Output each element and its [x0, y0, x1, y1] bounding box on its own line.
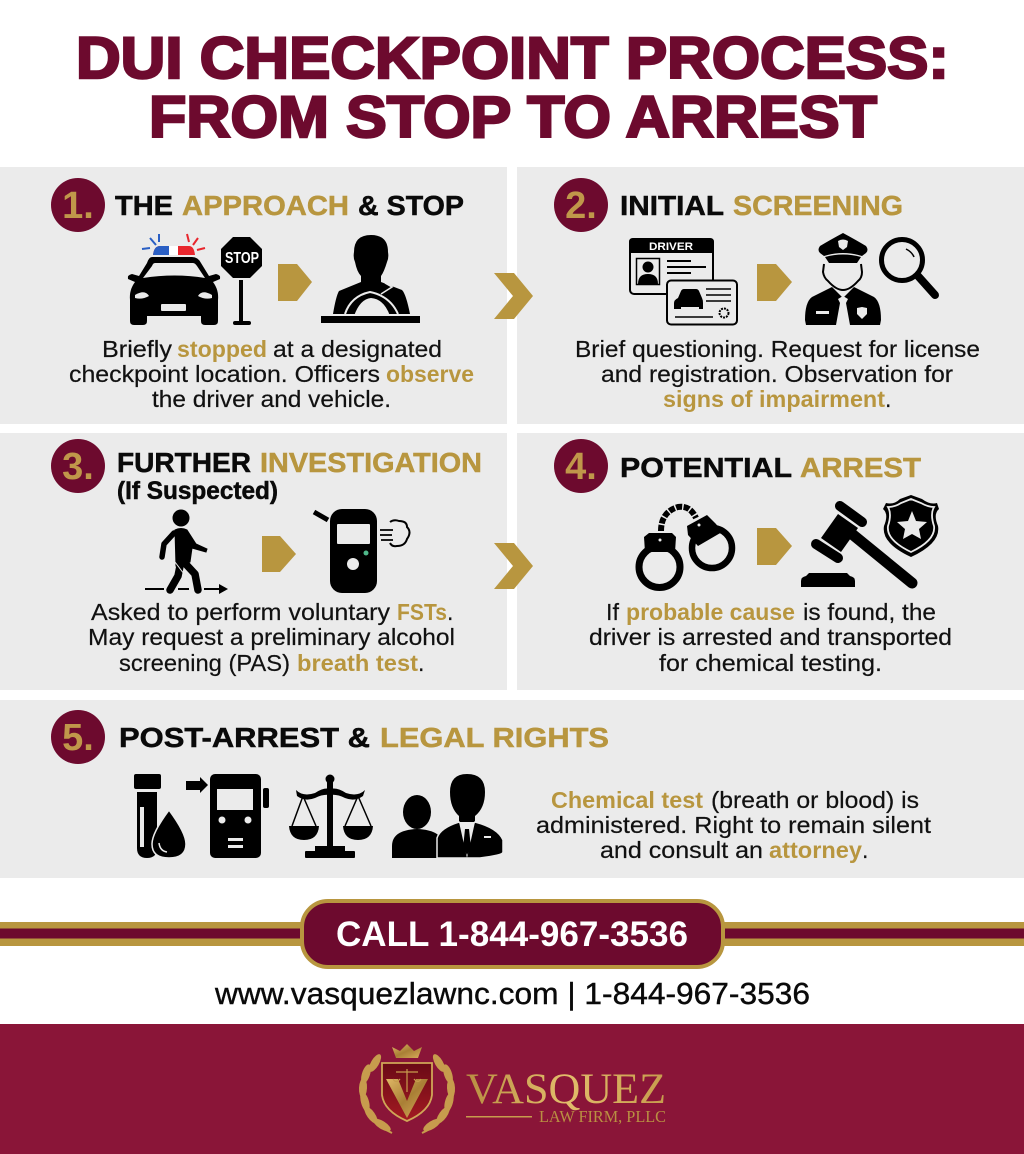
icon: evidential breath machine	[186, 774, 269, 858]
body text	[589, 599, 952, 676]
panel: step 4 potential arrest	[517, 433, 1024, 690]
icon: stop sign	[221, 237, 262, 325]
body text: If	[606, 599, 620, 625]
step number 3	[51, 439, 105, 493]
arrow	[757, 264, 792, 301]
step number 2: 2.	[565, 185, 597, 227]
call banner stripes	[0, 922, 1024, 946]
heading: further investigation: FURTHER	[117, 447, 251, 478]
heading: potential arrest	[620, 452, 921, 483]
body text: May request a preliminary alcohol	[88, 624, 455, 650]
body text: .	[885, 386, 891, 412]
icon: breathalyzer	[314, 509, 410, 593]
icon: gavel	[801, 506, 912, 587]
call button: CALL 1-844-967-3536	[336, 915, 688, 954]
body text: the driver and vehicle.	[152, 386, 391, 412]
icon: police car	[128, 234, 220, 325]
body text: observe	[386, 361, 474, 387]
icon: handcuffs	[639, 507, 732, 588]
step number 5: 5.	[62, 717, 94, 759]
body text: driver is arrested and transported	[589, 624, 952, 650]
heading: post-arrest and legal rights: POST-ARREST &	[119, 722, 370, 753]
body text: .	[447, 599, 453, 625]
body text: Brief questioning. Request for license	[575, 336, 980, 362]
title: FROM STOP TO ARREST	[149, 85, 877, 150]
icon: police officer	[805, 233, 881, 325]
icon: person walking the line	[145, 510, 228, 594]
heading: further investigation: INVESTIGATION	[260, 447, 482, 478]
body text: breath test	[297, 650, 418, 676]
panel: step 5 post-arrest and legal rights	[0, 700, 1024, 878]
icon: police badge	[883, 495, 939, 557]
logo laurel left	[358, 1052, 393, 1134]
body text: probable cause	[626, 599, 795, 625]
heading: further investigation: (If Suspected)	[117, 477, 278, 505]
title	[76, 26, 949, 150]
heading: the approach and stop	[115, 190, 464, 221]
body text: attorney	[769, 837, 862, 863]
body text: (breath or blood) is	[711, 787, 919, 813]
icon: blood test tube and drop	[134, 774, 186, 858]
logo laurel right	[421, 1052, 456, 1134]
icon: stop sign: STOP	[225, 250, 259, 267]
heading: post-arrest and legal rights	[119, 722, 609, 753]
step number 3: 3.	[62, 446, 94, 488]
body text: checkpoint location. Officers	[69, 361, 380, 387]
logo: vasquez law firm	[358, 1044, 666, 1134]
heading: the approach and stop: & STOP	[358, 190, 464, 221]
step number 1: 1.	[62, 185, 94, 227]
step number 4	[554, 439, 608, 493]
heading: further investigation	[117, 447, 482, 505]
body text	[69, 336, 474, 412]
heading: the approach and stop: THE	[115, 190, 173, 221]
logo shield	[382, 1063, 432, 1121]
body text: is found, the	[803, 599, 936, 625]
icon: scales of justice	[289, 774, 373, 858]
body text: .	[862, 837, 868, 863]
body text: screening (PAS)	[119, 650, 290, 676]
body text: at a designated	[273, 336, 442, 362]
step number 2	[554, 178, 608, 232]
icon: driver license: DRIVER	[649, 241, 693, 253]
heading: initial screening: SCREENING	[733, 190, 903, 221]
arrow	[278, 264, 312, 301]
body text: .	[418, 650, 424, 676]
body text: and consult an	[600, 837, 763, 863]
heading: post-arrest and legal rights: LEGAL RIGHTS	[380, 722, 609, 753]
logo wordmark: VASQUEZ	[466, 1066, 666, 1113]
heading: potential arrest: ARREST	[800, 452, 921, 483]
heading: potential arrest: POTENTIAL	[620, 452, 792, 483]
panel: step 1 the approach and stop	[0, 167, 507, 424]
heading: initial screening: INITIAL	[620, 190, 724, 221]
contact line: www.vasquezlawnc.com | 1-844-967-3536	[214, 976, 810, 1011]
call button	[302, 901, 723, 967]
step number 5	[51, 710, 105, 764]
chevron: step 1 to step 2	[494, 273, 533, 319]
body text: signs of impairment	[663, 386, 885, 412]
body text: Chemical test	[551, 787, 703, 813]
icon: driver license	[629, 238, 714, 294]
logo crown	[392, 1044, 422, 1058]
body text	[88, 599, 455, 676]
chevron: step 3 to step 4	[494, 543, 533, 589]
step number 1	[51, 178, 105, 232]
panel: step 2 initial screening	[517, 167, 1024, 424]
body text: for chemical testing.	[659, 650, 882, 676]
panel: step 3 further investigation	[0, 433, 507, 690]
arrow	[757, 528, 792, 565]
heading: the approach and stop: APPROACH	[182, 190, 349, 221]
body text: and registration. Observation for	[601, 361, 953, 387]
body text: FSTs	[397, 599, 447, 625]
body text: Briefly	[102, 336, 173, 362]
title: DUI CHECKPOINT PROCESS:	[76, 26, 949, 91]
icon: client and attorney	[392, 774, 503, 858]
body text	[536, 787, 932, 863]
logo: vasquez law firm: LAW FIRM, PLLC	[539, 1107, 666, 1126]
icon: vehicle registration card	[667, 280, 737, 324]
body text: stopped	[177, 336, 267, 362]
heading: initial screening	[620, 190, 903, 221]
body text: administered. Right to remain silent	[536, 812, 932, 838]
body text: Asked to perform voluntary	[91, 599, 391, 625]
body text	[575, 336, 980, 412]
arrow	[262, 536, 296, 572]
icon: magnifying glass	[882, 240, 935, 295]
step number 4: 4.	[565, 446, 597, 488]
icon: driver at steering wheel	[321, 235, 420, 323]
footer band	[0, 1024, 1024, 1154]
